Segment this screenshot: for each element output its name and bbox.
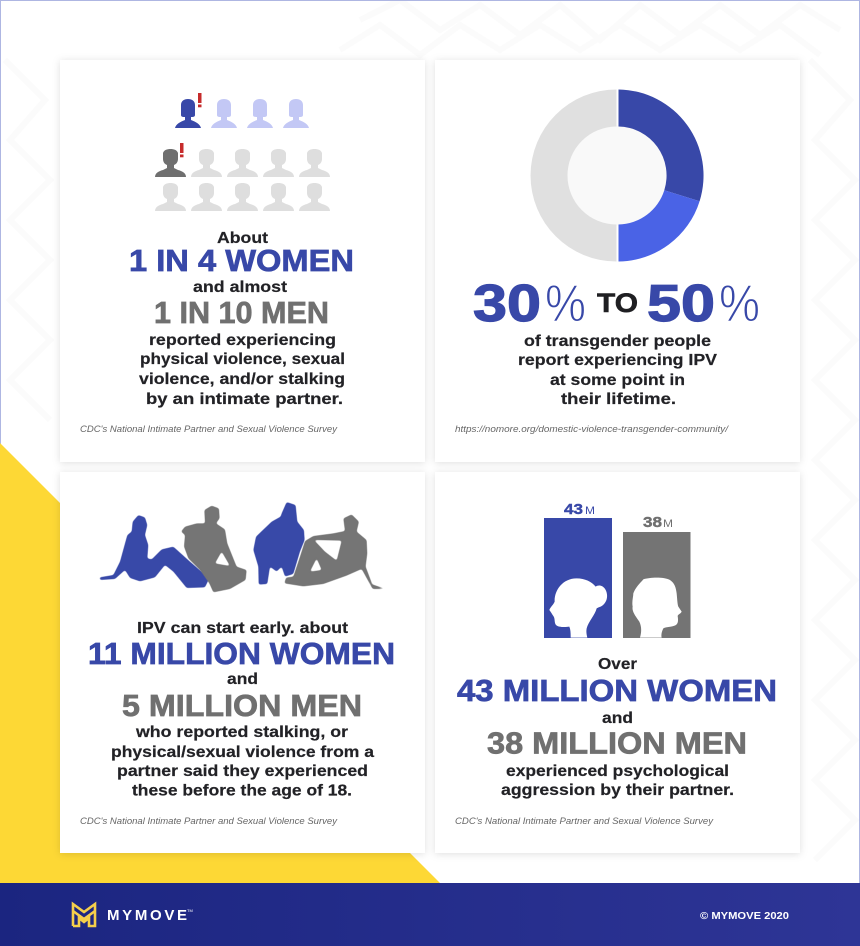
panel: transgender IPV <box>435 60 800 462</box>
copyright: © MYMOVE 2020 <box>700 910 789 922</box>
headline 30% to 50%: 50 <box>647 275 715 333</box>
yellow triangle accent <box>0 443 440 883</box>
statement text: 43 MILLION WOMEN <box>457 674 777 708</box>
source: https://nomore.org/domestic-violence-transgender-community/ <box>455 424 729 435</box>
statement text: their lifetime. <box>561 391 676 408</box>
icon: men rows <box>155 143 330 211</box>
bar: 38M men: 38 <box>643 514 662 531</box>
statement text: 1 IN 4 WOMEN <box>129 244 354 278</box>
statement text: and <box>227 671 258 688</box>
statement text: these before the age of 18. <box>132 782 352 800</box>
headline 30% to 50%: % <box>545 275 586 333</box>
silhouettes of seated teens <box>99 502 386 592</box>
statement text <box>129 230 354 408</box>
source: CDC's National Intimate Partner and Sexual Violence Survey <box>80 424 338 435</box>
headline 30% to 50%: TO <box>597 288 638 318</box>
brand name: TM <box>187 908 193 913</box>
statement text: and almost <box>193 279 287 296</box>
statement text: aggression by their partner. <box>501 782 734 799</box>
panel: IPV starts early <box>60 472 425 853</box>
panel: 1 in 4 women <box>60 60 425 462</box>
statement text: violence, and/or stalking <box>139 371 345 388</box>
headline 30% to 50%: 30 <box>473 275 541 333</box>
statement text: Over <box>598 656 637 673</box>
statement text <box>457 656 777 799</box>
statement text: who reported stalking, or <box>135 724 348 741</box>
statement text: report experiencing IPV <box>518 352 718 369</box>
statement text: About <box>217 230 268 247</box>
statement text: 5 MILLION MEN <box>122 689 362 723</box>
bar: 43M women <box>544 501 612 638</box>
statement text: of transgender people <box>524 333 711 350</box>
source: CDC's National Intimate Partner and Sexual Violence Survey <box>455 816 714 827</box>
statement text: experienced psychological <box>506 763 729 780</box>
footer <box>0 883 860 946</box>
bar: 38M men: M <box>663 518 673 530</box>
statement text: physical/sexual violence from a <box>111 744 374 761</box>
statement text: partner said they experienced <box>117 763 368 780</box>
icon: MyMove logo <box>73 904 95 926</box>
icon: women row <box>175 93 309 128</box>
statement text: reported experiencing <box>149 332 336 349</box>
brand name: MYMOVE <box>107 907 187 924</box>
bar: 38M men <box>623 514 690 638</box>
headline 30% to 50% <box>473 275 760 333</box>
statement text: 11 MILLION WOMEN <box>88 637 395 671</box>
bar: 43M women: 43 <box>564 501 583 518</box>
bar: 43M women: M <box>585 505 595 517</box>
statement text: IPV can start early. about <box>137 620 348 637</box>
statement text: 1 IN 10 MEN <box>154 296 329 330</box>
statement text: 38 MILLION MEN <box>487 726 747 760</box>
statement text: at some point in <box>550 372 685 389</box>
headline 30% to 50%: % <box>719 275 760 333</box>
statement text: physical violence, sexual <box>140 351 345 368</box>
statement text <box>88 620 395 800</box>
statement text <box>518 333 718 408</box>
source: CDC's National Intimate Partner and Sexual Violence Survey <box>80 816 338 827</box>
statement text: by an intimate partner. <box>146 391 343 408</box>
donut chart <box>531 90 704 262</box>
statement text: and <box>602 710 633 727</box>
panel: psychological aggression <box>435 472 800 853</box>
